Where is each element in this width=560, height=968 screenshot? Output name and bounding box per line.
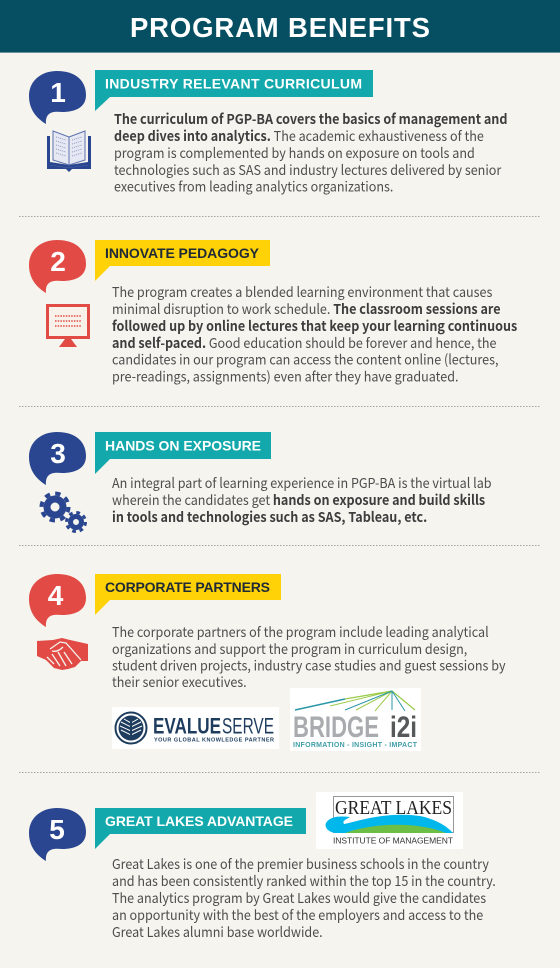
text block 4: The corporate partners of the program include leading analytical (112, 621, 489, 641)
number bubble 2 (29, 240, 86, 293)
icon: handshake (37, 638, 88, 670)
logo: Bridge i2i: i2i (390, 711, 417, 744)
number bubble 5: 5 (49, 814, 65, 845)
number bubble 4: 4 (48, 580, 64, 611)
title banner (0, 0, 560, 53)
text block 1: technologies such as SAS and industry lectures delivered by senior (114, 159, 502, 179)
text block 1: program is complemented by hands on exposure on tools and (114, 142, 475, 162)
icon: open book (47, 131, 91, 172)
text block 2: candidates in our program can access the content online (lectures, (112, 349, 498, 369)
heading ribbon 1: INDUSTRY RELEVANT CURRICULUM (105, 76, 362, 92)
text block 4: their senior executives. (112, 671, 247, 691)
text block 1: executives from leading analytics organizations. (114, 176, 393, 196)
number bubble 2: 2 (50, 246, 66, 277)
text block 4: organizations and support the program in curriculum design, (112, 638, 467, 658)
text block 5: Great Lakes is one of the premier business schools in the country (112, 853, 489, 873)
logo: Bridge i2i: BRIDGE (293, 711, 379, 744)
title banner: PROGRAM BENEFITS (130, 12, 430, 43)
heading ribbon 3: HANDS ON EXPOSURE (105, 438, 261, 454)
number bubble 3 (29, 432, 86, 485)
text block 2: pre-readings, assignments) even after they have graduated. (112, 366, 458, 386)
text block 2: The program creates a blended learning environment that causes (112, 281, 492, 301)
logo: Evalueserve: SERVE (222, 714, 274, 738)
heading ribbon 3 (95, 432, 271, 474)
logo: Great Lakes (316, 792, 463, 849)
icon: monitor (48, 306, 88, 347)
number bubble 5 (29, 808, 86, 861)
number bubble 4 (29, 574, 86, 627)
text block 5: Great Lakes alumni base worldwide. (112, 921, 323, 941)
text block 3: hands on exposure and build skills (273, 489, 486, 509)
heading ribbon 2 (95, 240, 270, 281)
text block 5: an opportunity with the best of the employers and access to the (112, 904, 483, 924)
logo: Bridge i2i: INFORMATION - INSIGHT - IMPACT (293, 742, 418, 749)
heading ribbon 4: CORPORATE PARTNERS (105, 579, 270, 595)
panel: section 2 (29, 240, 520, 386)
panel: section 4 (29, 574, 508, 751)
logo: Great Lakes: GREAT LAKES (335, 797, 452, 819)
text block 1: deep dives into analytics. (114, 125, 271, 145)
text block 3: An integral part of learning experience in PGP-BA is the virtual lab (112, 472, 492, 492)
heading ribbon 5: GREAT LAKES ADVANTAGE (105, 813, 293, 829)
text block 4: student driven projects, industry case studies and guest sessions by (112, 655, 506, 675)
number bubble 1 (29, 71, 86, 124)
text block 5: The analytics program by Great Lakes would give the candidates (112, 887, 486, 907)
logo: Evalueserve (112, 707, 279, 749)
number bubble 3: 3 (50, 438, 66, 469)
logo: Great Lakes: INSTITUTE OF MANAGEMENT (333, 836, 453, 846)
text block 5: and has been consistently ranked within the top 15 in the country. (112, 870, 496, 890)
heading ribbon 4 (95, 574, 281, 615)
panel: section 5 (29, 792, 499, 941)
text block 3: in tools and technologies such as SAS, Tableau, etc. (112, 506, 427, 526)
text block 2: The classroom sessions are (333, 298, 501, 318)
icon: gears (42, 494, 86, 532)
logo: Evalueserve: YOUR GLOBAL KNOWLEDGE PARTNER (154, 738, 274, 744)
logo: Bridge i2i (290, 688, 421, 751)
heading ribbon 1 (95, 70, 373, 111)
text block 2: Good education should be forever and hence, the (206, 332, 496, 352)
logo: Evalueserve: EVALUE (153, 714, 221, 738)
number bubble 1: 1 (50, 77, 66, 108)
text block 2: minimal disruption to work schedule. (112, 298, 333, 318)
panel: section 1 (29, 70, 510, 196)
text block 2: followed up by online lectures that keep your learning continuous (112, 315, 518, 335)
text block 1: The academic exhaustiveness of the (271, 125, 484, 145)
text block 3: wherein the candidates get (112, 489, 273, 509)
text block 2: and self-paced. (112, 332, 206, 352)
heading ribbon 5 (95, 808, 306, 849)
text block 1: The curriculum of PGP-BA covers the basics of management and (114, 108, 507, 128)
panel: section 3 (29, 432, 494, 532)
heading ribbon 2: INNOVATE PEDAGOGY (105, 245, 260, 261)
